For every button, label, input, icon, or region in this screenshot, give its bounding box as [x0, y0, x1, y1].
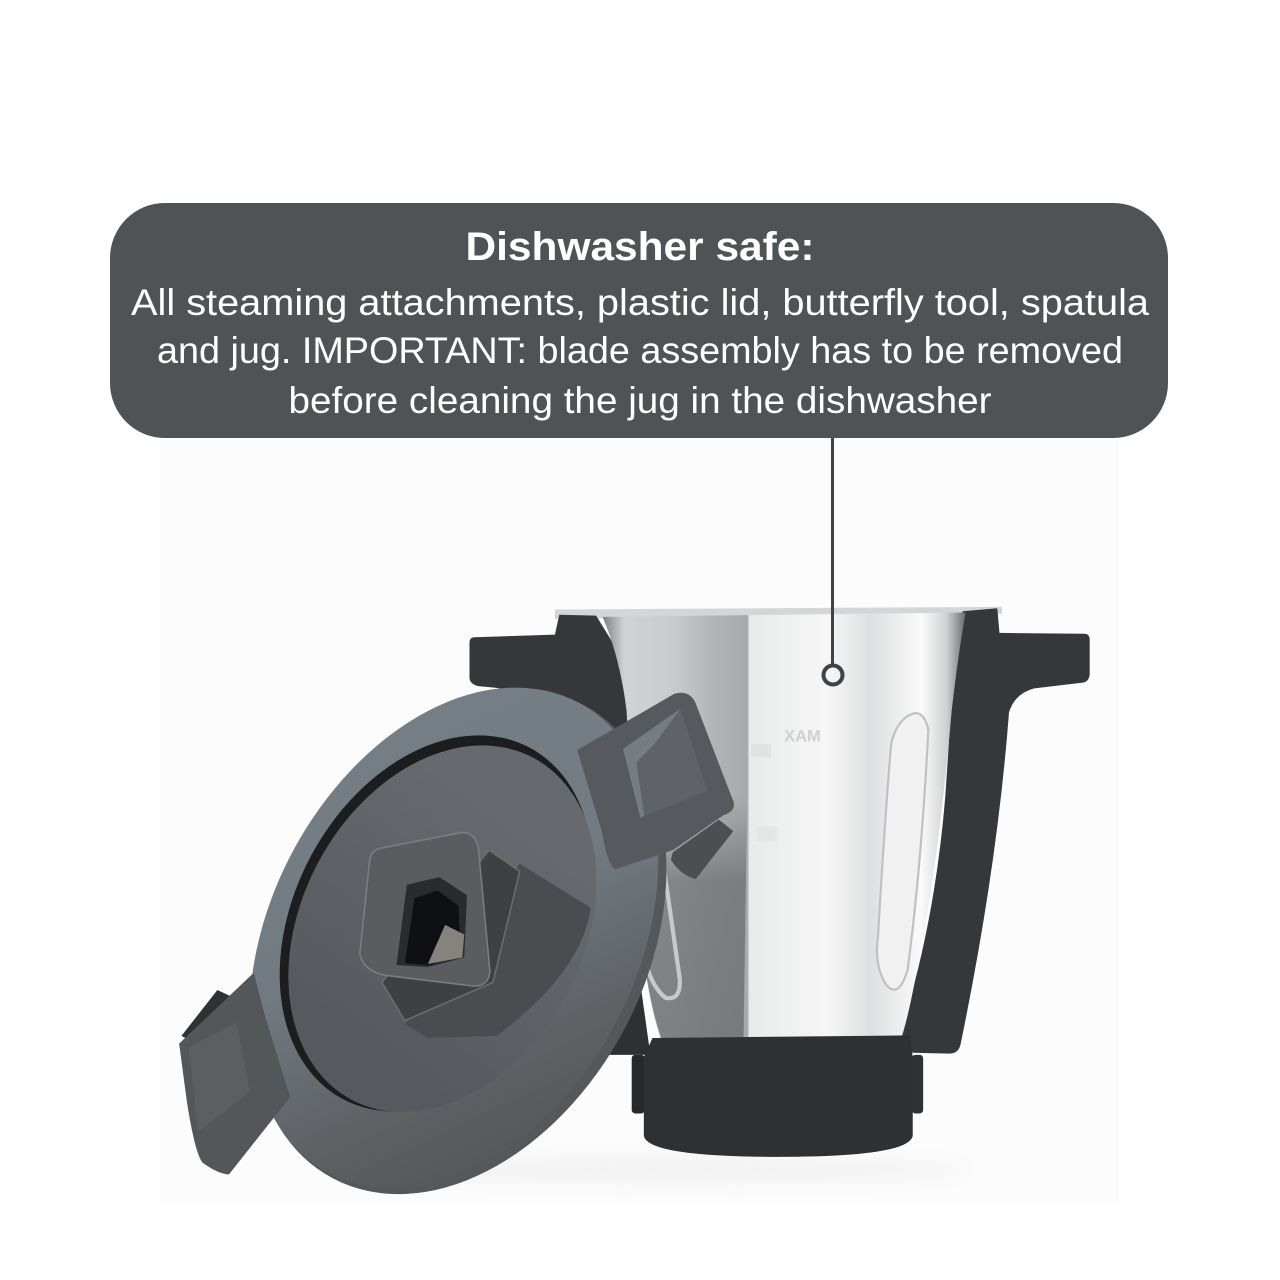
clip — [671, 820, 733, 879]
jug right handle — [900, 608, 1090, 1054]
lid centre square tube — [360, 832, 490, 986]
callout panel — [110, 203, 1168, 438]
lid centre funnel — [397, 877, 467, 967]
callout heading: Dishwasher safe: — [466, 225, 814, 269]
callout pointer line — [831, 436, 834, 666]
tick marks middle — [757, 826, 777, 841]
lid disk shadow — [405, 864, 591, 1038]
jug inner window — [877, 713, 928, 990]
lid inner disk — [227, 692, 658, 1166]
floor shadow — [390, 1160, 970, 1180]
jug rim — [555, 607, 1002, 619]
jug base side foot left — [632, 1055, 645, 1113]
jug left lower bracket — [604, 983, 650, 1055]
left handle — [179, 973, 290, 1174]
callout body line 1: All steaming attachments, plastic lid, butterfly tool, spatula — [131, 282, 1149, 323]
lid blade — [428, 925, 464, 964]
lid groove — [217, 681, 655, 1166]
photo background — [160, 438, 1119, 1204]
top right handle — [579, 694, 733, 879]
jug left lower shadow — [631, 797, 747, 1038]
jug steel body — [603, 613, 966, 1038]
lid outer edge — [167, 617, 750, 1266]
tick marks top — [751, 744, 771, 757]
callout body line 3: before cleaning the jug in the dishwasher — [288, 380, 992, 421]
steel wire loop — [646, 871, 680, 998]
clip — [181, 990, 230, 1040]
jug measuring marks — [751, 727, 821, 841]
recess — [189, 1023, 250, 1132]
max label: MAX — [784, 727, 821, 745]
product: lid — [167, 617, 750, 1266]
lid centre plate — [382, 850, 520, 1021]
product: stainless steel jug — [469, 607, 1090, 1157]
jug base collar — [644, 1035, 913, 1157]
recess — [623, 709, 707, 818]
lid centre hole — [405, 890, 460, 965]
callout pointer ring — [824, 666, 842, 684]
jug left handle wing — [469, 615, 631, 788]
jug base side foot right — [912, 1055, 923, 1113]
lid rim — [167, 617, 740, 1259]
callout body line 2: and jug. IMPORTANT: blade assembly has to be removed — [157, 330, 1123, 371]
